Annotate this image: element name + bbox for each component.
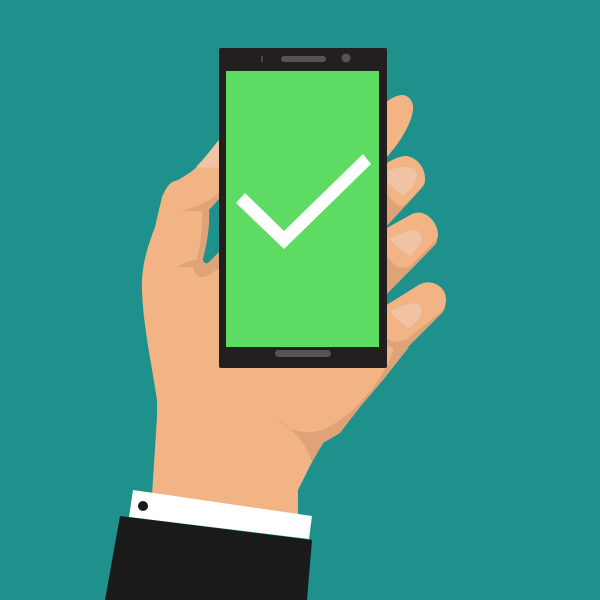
palm and wrist xyxy=(142,136,407,520)
phone xyxy=(219,48,387,368)
home button xyxy=(275,350,331,357)
cuff button xyxy=(138,501,148,511)
screen xyxy=(226,71,379,347)
thumb web shadow xyxy=(177,191,220,277)
gap between thumb and palm xyxy=(203,198,220,263)
middle fingernail xyxy=(388,167,417,196)
ring finger shadow xyxy=(385,240,437,296)
check mark xyxy=(236,154,371,249)
middle finger shadow xyxy=(385,180,425,228)
camera xyxy=(342,54,350,62)
little finger shadow xyxy=(385,303,445,349)
ring fingernail xyxy=(389,230,421,256)
ring finger xyxy=(385,213,438,268)
thumb highlight xyxy=(196,139,220,168)
phone body xyxy=(219,48,387,368)
index finger xyxy=(385,95,413,159)
jacket sleeve xyxy=(105,516,312,600)
little finger xyxy=(385,282,446,342)
speaker xyxy=(281,56,326,62)
hand xyxy=(142,95,446,520)
shirt cuff xyxy=(129,490,312,539)
sensor xyxy=(261,56,263,62)
palm crease and edge shadow xyxy=(277,345,409,462)
little fingernail xyxy=(390,303,421,328)
middle finger xyxy=(385,156,425,206)
